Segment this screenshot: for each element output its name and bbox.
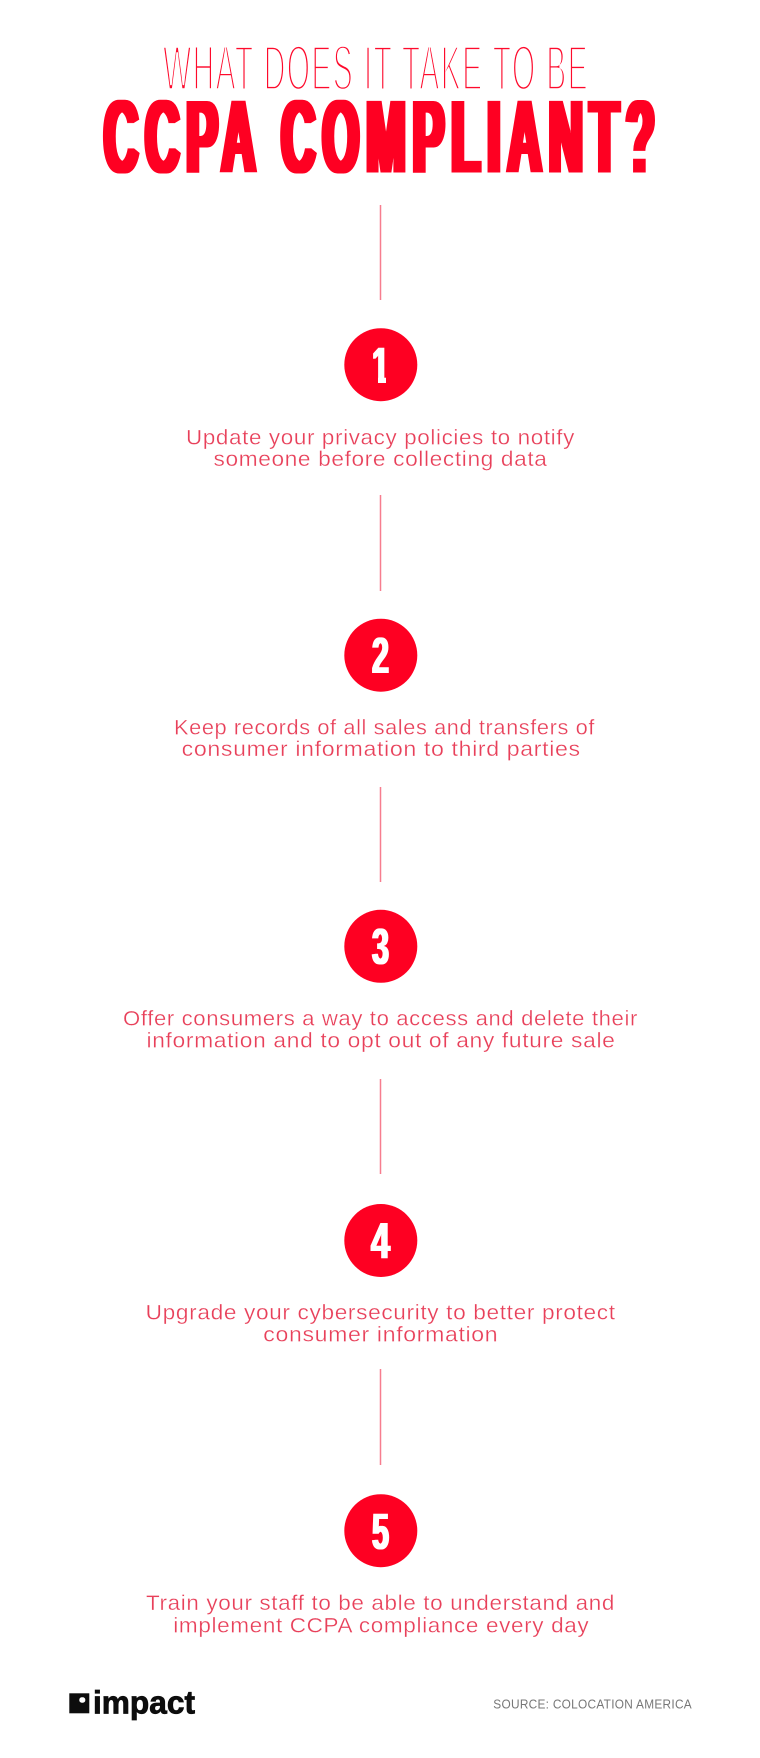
step 5 text: implement CCPA compliance every day: [173, 1613, 589, 1637]
number badge 1: [344, 328, 417, 401]
title: [104, 32, 662, 196]
step 1 text: someone before collecting data: [214, 447, 548, 471]
number badge 3: 3: [372, 918, 389, 975]
connector line: [380, 787, 382, 882]
step 2 text: Keep records of all sales and transfers of: [174, 715, 595, 739]
step 5: [146, 1494, 615, 1637]
step 4 text: Upgrade your cybersecurity to better protect: [146, 1300, 616, 1324]
step 1 text: [186, 425, 575, 471]
step 3 text: Offer consumers a way to access and delete their: [123, 1006, 638, 1030]
step 2 text: consumer information to third parties: [182, 737, 581, 761]
number badge 4: 4: [371, 1212, 390, 1269]
step 4 text: [146, 1300, 616, 1347]
step 4: [146, 1204, 616, 1347]
number badge 5: 5: [372, 1503, 389, 1560]
connector line: [380, 1079, 382, 1174]
step 2: [174, 619, 595, 761]
step 4 text: consumer information: [263, 1323, 498, 1347]
step 2 text: [174, 715, 595, 761]
step 3 text: [123, 1006, 638, 1052]
connector line: [380, 495, 382, 591]
number badge 2: 2: [372, 627, 389, 684]
number badge 1: 1: [372, 337, 389, 394]
step 3 text: information and to opt out of any future sale: [146, 1028, 616, 1052]
step 5 text: Train your staff to be able to understand and: [146, 1591, 615, 1615]
logo wordmark: impact: [93, 1684, 195, 1720]
logo square icon: [69, 1693, 89, 1713]
source credit: SOURCE: COLOCATION AMERICA: [493, 1696, 692, 1711]
logo: impact: [69, 1684, 195, 1720]
number badge 2: [344, 619, 417, 692]
number badge 4: [344, 1204, 417, 1277]
number badge 5: [344, 1494, 417, 1567]
step 5 text: [146, 1591, 615, 1637]
step 3: [123, 910, 638, 1052]
step 1: [186, 328, 575, 471]
step 1 text: Update your privacy policies to notify: [186, 425, 575, 449]
connector line: [380, 205, 382, 300]
number badge 3: [344, 910, 417, 983]
connector line: [380, 1369, 382, 1465]
